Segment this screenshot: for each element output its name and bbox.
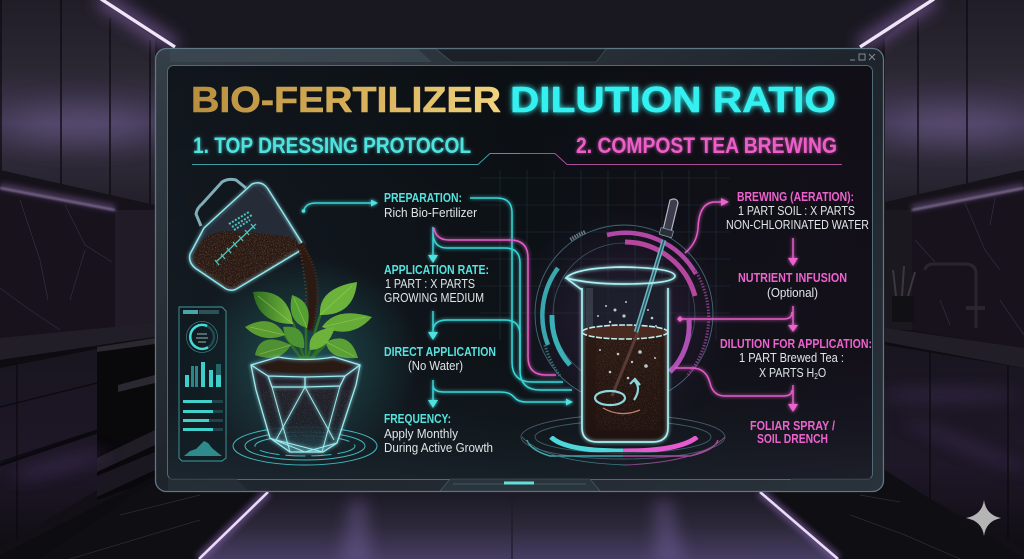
window controls: [850, 54, 875, 60]
utensil holder: [892, 266, 915, 322]
icon: glowing pot platform: [233, 427, 377, 465]
text: frequency: Apply Monthly: [384, 426, 458, 441]
text: dilution for application: 1 PART Brewed Tea :: [739, 350, 844, 365]
text: dilution for application: [720, 336, 872, 381]
arrow: cup to preparation: [302, 200, 378, 213]
cyan flow connectors: [302, 198, 573, 408]
text: preparation: Rich Bio-Fertilizer: [384, 205, 478, 220]
heading: compost tea brewing: 2. COMPOST TEA BREWING: [576, 133, 837, 158]
handle: [196, 179, 246, 226]
text: preparation: [384, 190, 478, 220]
right counter: [885, 328, 1024, 368]
icon: plant glow: [190, 255, 420, 465]
text: brewing: 1 PART SOIL : X PARTS: [738, 203, 855, 218]
arrow: beaker to brewing: [685, 198, 729, 253]
icon: beaker rings: [512, 210, 732, 430]
foam surface: [582, 325, 668, 339]
text: application rate: [384, 262, 489, 305]
heading: top dressing protocol: 1. TOP DRESSING PROTOCOL: [193, 133, 471, 158]
floor light strips: [199, 492, 838, 559]
icon: measuring cup pouring soil: [190, 179, 302, 290]
text: frequency: FREQUENCY:: [384, 411, 451, 426]
soil stream: [300, 244, 318, 330]
top tabs: [170, 49, 432, 62]
stirring rod: [612, 332, 638, 396]
right marble backsplash: [912, 188, 1024, 350]
text: application rate: 1 PART : X PARTS: [385, 276, 475, 291]
text: foliar spray: FOLIAR SPRAY /: [750, 418, 835, 433]
arrow: branch to beaker: [677, 312, 792, 322]
right cabinet underside: [885, 170, 1024, 210]
connector: application rate to beaker: [433, 234, 572, 390]
text: foliar spray: SOIL DRENCH: [757, 431, 828, 446]
arrow: dilution to foliar spray: [788, 385, 798, 412]
glass window frame: [156, 48, 884, 492]
text: dilution for application: O: [818, 365, 826, 380]
text: brewing: BREWING (AERATION):: [737, 189, 854, 204]
connector: left magenta line: [434, 228, 556, 375]
text: application rate: GROWING MEDIUM: [384, 290, 484, 305]
connector: direct application branch: [433, 320, 520, 370]
mini bar chart: [185, 362, 221, 387]
watermark sparkle: [966, 500, 1001, 536]
magenta flow connectors: [434, 198, 798, 412]
left upper cabinets: [0, 0, 155, 207]
heading: compost tea brewing: [520, 133, 842, 164]
pot soil: [261, 359, 351, 373]
left cabinet underside: [0, 170, 155, 210]
title: cyan part: DILUTION RATIO: [510, 79, 836, 120]
text: direct application: [384, 344, 496, 373]
arrow: direct application to beaker: [433, 386, 573, 406]
icon: beaker platform: [521, 415, 725, 465]
floor left: [0, 476, 155, 559]
under-cabinet light strips: [0, 188, 1024, 210]
text: nutrient infusion: NUTRIENT INFUSION: [738, 270, 847, 285]
beaker outline: [566, 267, 675, 442]
text: dilution for application: DILUTION FOR APPLICATION:: [720, 336, 872, 351]
right upper cabinets: [885, 0, 1024, 205]
bubbles: [597, 301, 657, 379]
soil in cup: [193, 231, 302, 289]
floor centre: [200, 492, 837, 559]
cup outline: [190, 183, 302, 290]
text: direct application: (No Water): [408, 358, 463, 373]
left counter: [0, 323, 155, 360]
gauge: [186, 322, 218, 353]
arrow: nutrient infusion to dilution: [788, 306, 798, 332]
text: nutrient infusion: [738, 270, 847, 300]
pot inner particles: [262, 390, 354, 450]
swirl arrows: [595, 379, 640, 414]
oven: [97, 338, 155, 500]
text: foliar spray: [750, 418, 835, 446]
cup markings: [215, 212, 256, 265]
connector: beaker to dilution branch: [675, 368, 792, 396]
arrow: application rate to direct application: [428, 311, 438, 340]
panel: dashboard widget: [179, 307, 226, 461]
left marble backsplash: [0, 188, 115, 340]
icon: plant leaves: [245, 282, 372, 362]
area chart: [184, 441, 222, 456]
arrow: direct application to frequency: [428, 380, 438, 408]
text: application rate: APPLICATION RATE:: [384, 262, 489, 277]
bottom tabs: [440, 479, 600, 491]
text: frequency: [384, 411, 493, 455]
ceiling light strips: [100, 0, 934, 47]
text: dilution for application: 2: [814, 371, 818, 381]
ceiling: [100, 0, 934, 48]
progress bars: [183, 400, 223, 431]
text: preparation: PREPARATION:: [384, 190, 462, 205]
text: brewing: NON-CHLORINATED WATER: [726, 217, 869, 232]
icon: beaker with compost tea: [566, 199, 678, 442]
text: dilution for application: X PARTS H: [759, 365, 814, 380]
icon: geometric glass pot: [251, 357, 360, 452]
text: frequency: During Active Growth: [384, 440, 493, 455]
arrow: brewing to nutrient infusion: [788, 238, 798, 266]
text: brewing: [726, 189, 869, 232]
arrow: preparation to application rate: [428, 227, 438, 263]
title: gold part: BIO-FERTILIZER: [191, 79, 501, 120]
connector: preparation to beaker: [470, 198, 563, 382]
faucet: [925, 264, 985, 328]
text: nutrient infusion: (Optional): [767, 285, 818, 300]
left drawers: [0, 349, 97, 548]
right drawers: [885, 345, 1024, 548]
tea liquid: [582, 332, 668, 441]
floor right: [760, 470, 1024, 559]
inner panel: [168, 66, 872, 480]
cup opening: [252, 184, 302, 246]
title: [191, 79, 836, 120]
centre grid: [480, 170, 730, 340]
text: direct application: DIRECT APPLICATION: [384, 344, 496, 359]
